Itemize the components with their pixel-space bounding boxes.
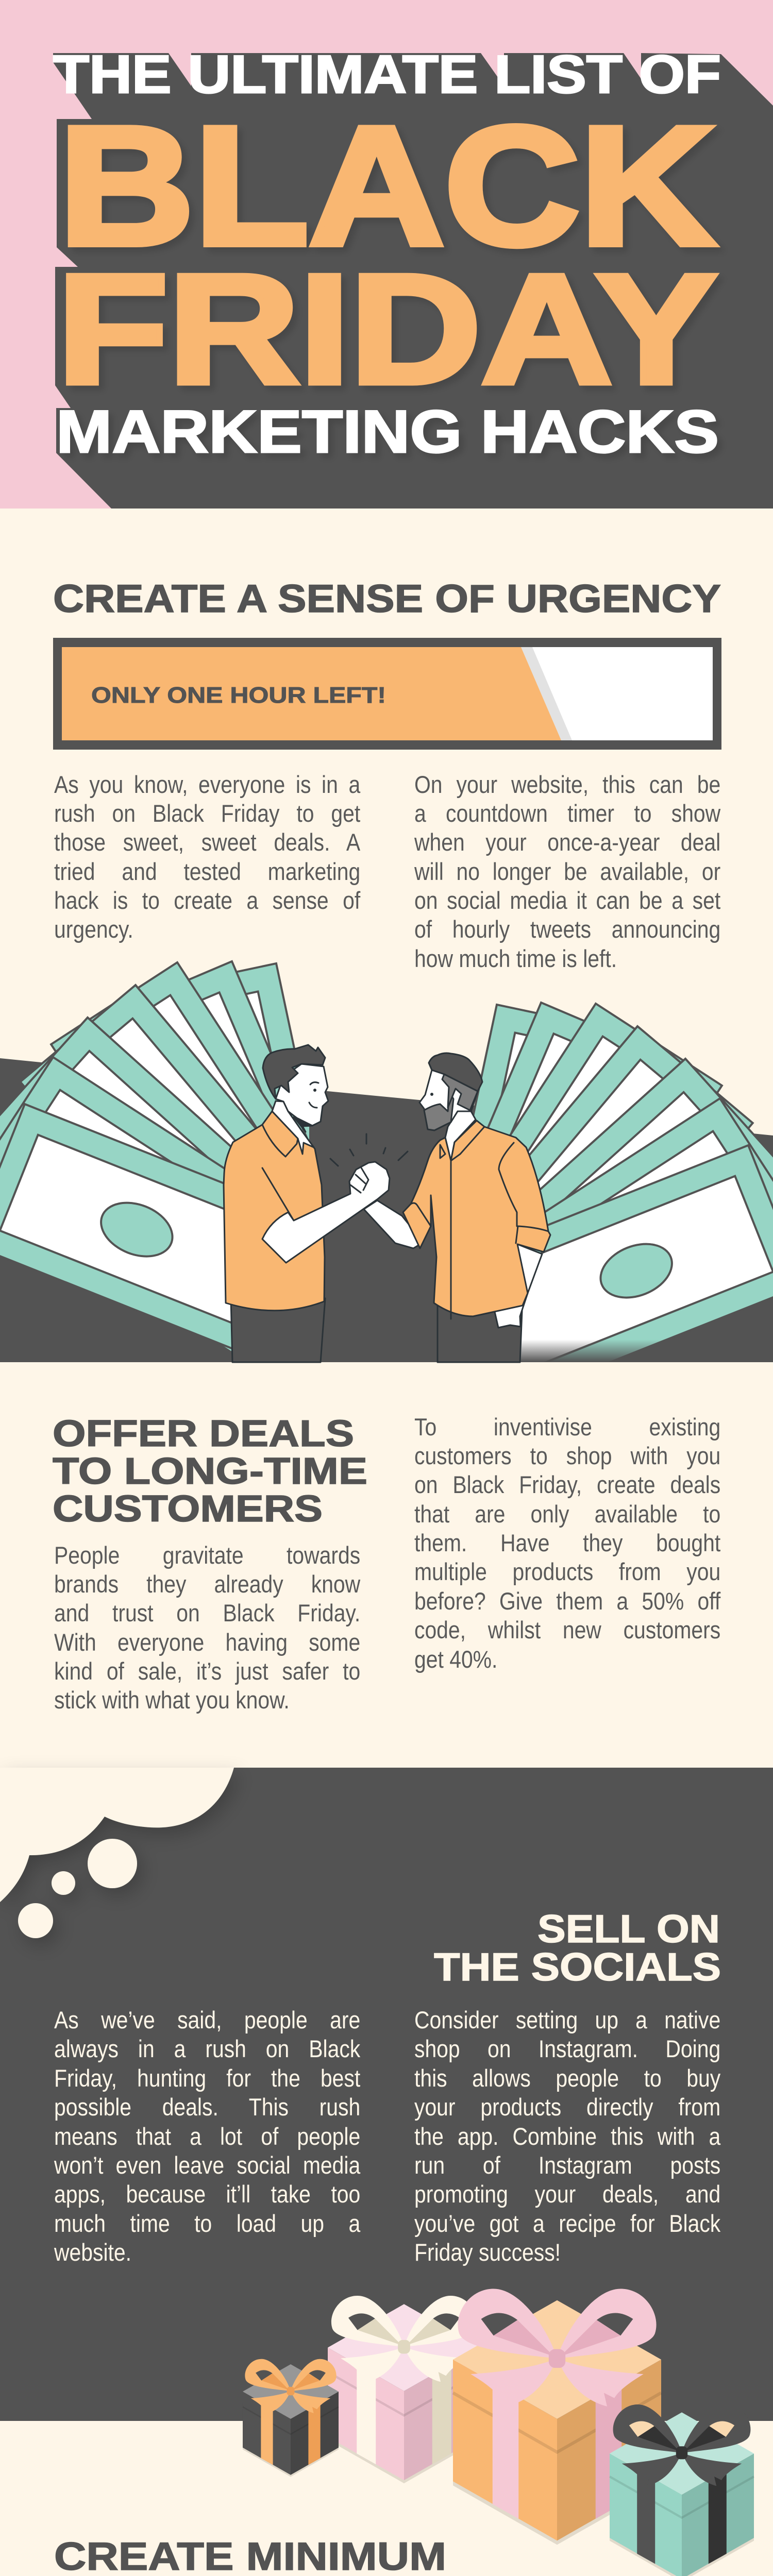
bar label: ONLY ONE HOUR LEFT!	[91, 683, 386, 708]
text block: deals left column: and trust on Black Friday.	[54, 1599, 360, 1626]
text block: urgency left column: rush on Black Friday to get	[54, 800, 360, 827]
gift: teal box	[610, 2404, 754, 2576]
text block: urgency right column	[414, 771, 720, 972]
text block: deals right column: on Black Friday, create deals	[414, 1471, 720, 1498]
text block: urgency left column: those sweet, sweet deals. A	[54, 828, 360, 856]
background: cream rewards section	[0, 2421, 773, 2576]
text block: socials left column: much time to load up a	[54, 2210, 360, 2237]
text block: deals right column: before? Give them a 50% off	[414, 1587, 720, 1615]
text block: deals left column	[54, 1541, 361, 1714]
text block: socials right column: shop on Instagram. Doing	[414, 2035, 720, 2062]
heading: offer deals to long-time customers: CUSTOMERS	[53, 1488, 323, 1530]
text block: deals right column: them. Have they bought	[414, 1529, 720, 1556]
text block: socials right column: your products directly from	[414, 2093, 720, 2121]
heading: sell on the socials: SELL ON	[537, 1907, 720, 1951]
text block: socials right column: the app. Combine this with a	[414, 2123, 720, 2150]
bubble: medium	[52, 1871, 75, 1895]
text block: socials right column: this allows people to buy	[414, 2064, 720, 2092]
text block: urgency right column: on social media it can be a set	[414, 887, 720, 914]
text block: socials left column: website.	[54, 2239, 131, 2266]
background: hero pink	[0, 0, 773, 509]
heading: offer deals to long-time customers: OFFER DEALS	[53, 1413, 354, 1454]
illustration: gift boxes upper group	[243, 2289, 754, 2576]
text block: socials right column: you’ve got a recipe for Black	[414, 2210, 720, 2237]
text block: urgency left column	[54, 771, 361, 943]
hero title panel	[53, 45, 773, 509]
text block: deals left column: People gravitate towards	[54, 1541, 360, 1568]
text block: socials right column: run of Instagram posts	[414, 2151, 720, 2179]
text block: deals left column: brands they already know	[54, 1570, 360, 1598]
bubble: large	[88, 1839, 137, 1888]
long shadow behind title	[53, 53, 773, 509]
text block: deals right column: To inventivise existing	[414, 1413, 720, 1440]
text block: urgency left column: As you know, everyone is in a	[54, 771, 360, 798]
text block: socials left column: won’t even leave social media	[54, 2151, 360, 2179]
heading: create a sense of urgency: CREATE A SENSE OF URGENCY	[53, 577, 721, 621]
background: cream sections one to three	[0, 509, 773, 1768]
thought bubble cloud	[0, 1768, 234, 1938]
text block: socials left column	[54, 2006, 361, 2266]
handshake spark lines	[330, 1134, 408, 1166]
man on left	[224, 1045, 390, 1362]
text block: deals right column: multiple products from you	[414, 1558, 720, 1585]
text block: urgency right column: how much time is left.	[414, 945, 617, 972]
gift: small dark box	[243, 2359, 339, 2477]
text block: deals right column	[414, 1413, 720, 1673]
text block: socials right column: Friday success!	[414, 2239, 561, 2266]
bubble: small	[18, 1903, 53, 1938]
text block: urgency right column: On your website, this can be	[414, 771, 720, 798]
text block: socials right column	[414, 2006, 720, 2266]
heading: sell on the socials: THE SOCIALS	[434, 1945, 721, 1989]
text block: socials right column: promoting your deals, and	[414, 2180, 720, 2208]
dark ground shape	[0, 1058, 773, 1362]
text block: deals left column: kind of sale, it’s just safer to	[54, 1657, 360, 1685]
text block: deals left column: With everyone having some	[54, 1629, 360, 1656]
text block: socials left column: means that a lot of people	[54, 2123, 360, 2150]
money fans	[0, 960, 773, 1361]
heading: offer deals to long-time customers	[53, 1413, 367, 1530]
title line: black: BLACK	[59, 91, 715, 280]
heading: sell on the socials	[434, 1907, 721, 1989]
text block: urgency right column: when your once-a-year deal	[414, 828, 720, 856]
text block: deals left column: stick with what you know.	[54, 1686, 290, 1714]
text block: urgency left column: tried and tested marketing	[54, 858, 360, 885]
text block: urgency right column: will no longer be available, or	[414, 858, 720, 885]
gift: pink box	[328, 2296, 480, 2483]
text block: socials left column: apps, because it’ll take too	[54, 2180, 360, 2208]
text block: socials left column: possible deals. This rush	[54, 2093, 360, 2121]
man on right	[364, 1053, 550, 1362]
text block: deals right column: that are only available to	[414, 1500, 720, 1528]
gift: big orange box	[453, 2289, 661, 2545]
countdown progress bar	[53, 638, 721, 750]
text block: socials right column: Consider setting up a native	[414, 2006, 720, 2033]
text block: deals right column: code, whilst new customers	[414, 1616, 720, 1643]
text block: urgency left column: hack is to create a sense of	[54, 887, 360, 914]
text block: deals right column: get 40%.	[414, 1646, 497, 1673]
illustration: two men shaking hands with money	[0, 960, 773, 1363]
text block: urgency right column: a countdown timer to show	[414, 800, 720, 827]
text block: socials left column: Friday, hunting for the best	[54, 2064, 360, 2092]
text block: urgency left column: urgency.	[54, 916, 133, 943]
title line: friday: FRIDAY	[57, 242, 717, 416]
title line: the ultimate list of: THE ULTIMATE LIST OF	[53, 45, 721, 105]
text block: deals right column: customers to shop with you	[414, 1442, 720, 1469]
title line: marketing hacks: MARKETING HACKS	[56, 398, 719, 465]
text block: socials left column: always in a rush on Black	[54, 2035, 360, 2062]
heading: offer deals to long-time customers: TO LONG-TIME	[53, 1451, 367, 1492]
text block: socials left column: As we’ve said, people are	[54, 2006, 360, 2033]
text block: urgency right column: of hourly tweets announcing	[414, 916, 720, 943]
background: dark socials section	[0, 1768, 773, 2421]
